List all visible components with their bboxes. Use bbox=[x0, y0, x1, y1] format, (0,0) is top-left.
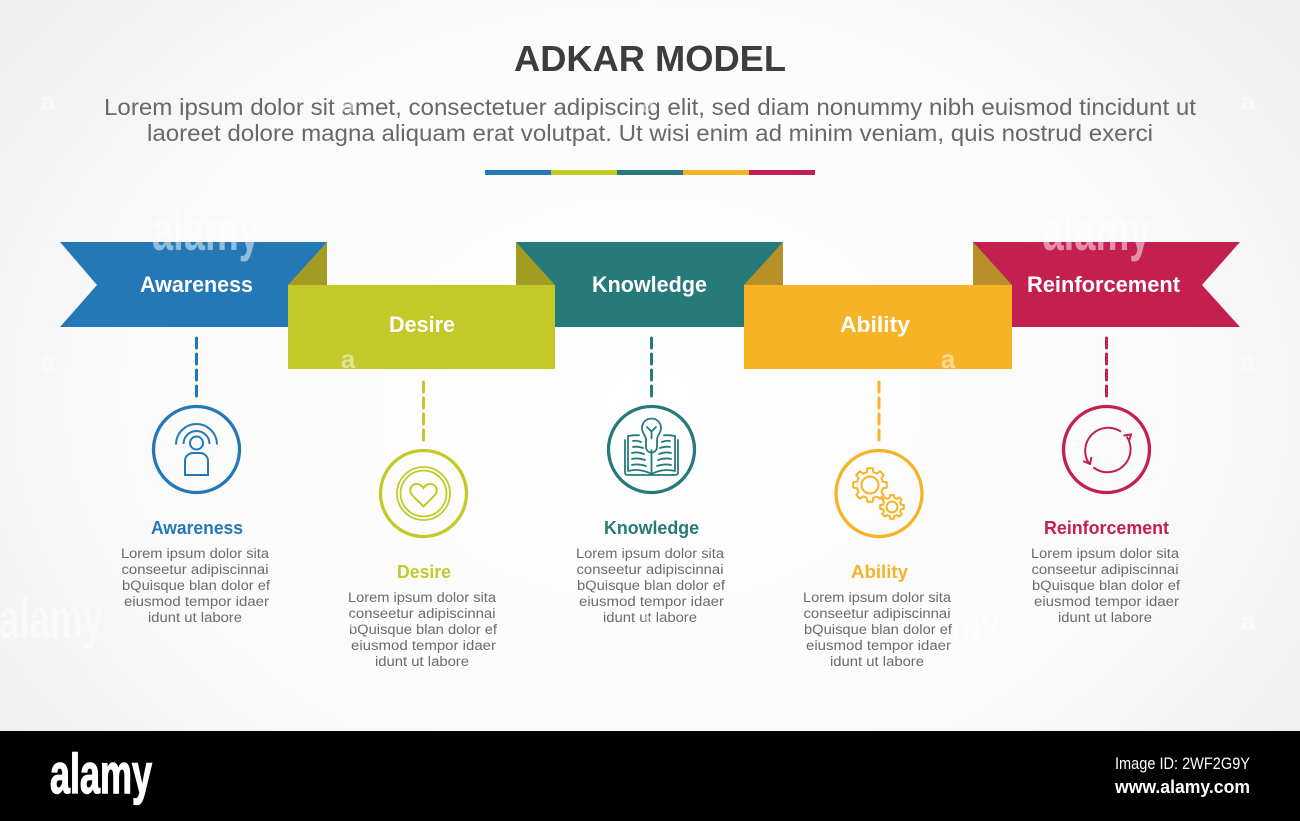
ribbon: reinforcement bbox=[973, 242, 1240, 327]
column: awareness bbox=[121, 338, 270, 625]
text: awareness: conseetur adipiscinnai bbox=[122, 562, 268, 577]
text: desire bbox=[348, 590, 497, 669]
ribbon: desire: Desire bbox=[389, 312, 455, 337]
column: ability bbox=[803, 382, 952, 669]
heading: desire: Desire bbox=[397, 562, 451, 582]
watermark overlay: my bbox=[951, 597, 999, 653]
connector: knowledge bbox=[650, 338, 653, 396]
watermark overlay: alamy bbox=[152, 199, 260, 262]
text: ability: idunt ut labore bbox=[830, 654, 924, 669]
column: reinforcement bbox=[1031, 338, 1180, 625]
heading: reinforcement: Reinforcement bbox=[1044, 518, 1169, 538]
text: ability: eiusmod tempor idaer bbox=[806, 638, 952, 653]
text: knowledge: bQuisque blan dolor ef bbox=[577, 578, 725, 593]
text: knowledge: conseetur adipiscinnai bbox=[576, 562, 724, 577]
text: awareness bbox=[121, 546, 270, 625]
text: desire: idunt ut labore bbox=[375, 654, 469, 669]
footer logo: alamy bbox=[50, 742, 152, 805]
column: knowledge bbox=[576, 338, 725, 625]
watermark overlay: a bbox=[1241, 86, 1256, 116]
watermark overlay: a bbox=[641, 88, 656, 118]
text: ability: Lorem ipsum dolor sita bbox=[803, 590, 952, 605]
connector: reinforcement bbox=[1105, 338, 1108, 396]
watermark overlay: alamy bbox=[0, 587, 103, 650]
website: www.alamy.com bbox=[1114, 777, 1250, 797]
connector: ability bbox=[878, 382, 880, 440]
text: desire: conseetur adipiscinnai bbox=[348, 606, 496, 621]
watermark overlay bbox=[0, 86, 1256, 653]
text: reinforcement: bQuisque blan dolor ef bbox=[1032, 578, 1180, 593]
text: knowledge: Lorem ipsum dolor sita bbox=[576, 546, 725, 561]
ribbon: knowledge bbox=[516, 242, 783, 327]
watermark overlay: a bbox=[941, 344, 956, 374]
text: awareness: idunt ut labore bbox=[148, 610, 242, 625]
watermark overlay: a bbox=[641, 606, 656, 636]
column: desire bbox=[348, 382, 497, 669]
watermark overlay: alamy bbox=[1042, 199, 1150, 262]
subtitle text bbox=[104, 94, 1197, 146]
watermark overlay: a bbox=[41, 346, 56, 376]
image id: Image ID: 2WF2G9Y bbox=[1115, 754, 1250, 773]
text: desire: Lorem ipsum dolor sita bbox=[348, 590, 497, 605]
watermark overlay: a bbox=[1241, 606, 1256, 636]
subtitle text: Lorem ipsum dolor sit amet, consectetuer adipiscing elit, sed diam nonummy nibh euismod tincidunt ut bbox=[104, 94, 1197, 120]
text: knowledge: eiusmod tempor idaer bbox=[579, 594, 725, 609]
ribbon banner bbox=[60, 242, 1240, 369]
ribbon: awareness bbox=[60, 242, 327, 327]
watermark overlay: a bbox=[41, 86, 56, 116]
icon: book with light bulb bbox=[608, 406, 694, 492]
icon: heart badge bbox=[380, 450, 466, 536]
connector: desire bbox=[422, 382, 425, 440]
ribbon: ability: Ability bbox=[840, 312, 911, 337]
ribbon: reinforcement: Reinforcement bbox=[1027, 272, 1181, 297]
colour divider bar bbox=[485, 170, 815, 175]
text: ability: bQuisque blan dolor ef bbox=[804, 622, 952, 637]
ribbon: ability bbox=[744, 285, 1012, 369]
heading: knowledge: Knowledge bbox=[604, 518, 699, 538]
icon: refresh arrows bbox=[1064, 406, 1150, 492]
ribbon: knowledge: Knowledge bbox=[592, 272, 707, 297]
watermark overlay: a bbox=[341, 606, 356, 636]
text: reinforcement: conseetur adipiscinnai bbox=[1032, 562, 1178, 577]
ribbon: awareness: Awareness bbox=[140, 272, 253, 297]
text: desire: bQuisque blan dolor ef bbox=[349, 622, 497, 637]
subtitle text: laoreet dolore magna aliquam erat volutpat. Ut wisi enim ad minim veniam, quis nostrud exerci bbox=[147, 120, 1153, 146]
heading: awareness: Awareness bbox=[151, 518, 243, 538]
icon: gears bbox=[836, 450, 922, 536]
text: awareness: Lorem ipsum dolor sita bbox=[121, 546, 270, 561]
title: ADKAR MODEL bbox=[514, 38, 786, 79]
text: reinforcement: idunt ut labore bbox=[1058, 610, 1152, 625]
text: reinforcement: eiusmod tempor idaer bbox=[1034, 594, 1180, 609]
text: desire: eiusmod tempor idaer bbox=[351, 638, 497, 653]
text: ability: conseetur adipiscinnai bbox=[804, 606, 950, 621]
text: reinforcement: Lorem ipsum dolor sita bbox=[1031, 546, 1180, 561]
ribbon: desire bbox=[288, 285, 555, 369]
watermark overlay: a bbox=[341, 344, 356, 374]
text: reinforcement bbox=[1031, 546, 1180, 625]
watermark overlay: a bbox=[1241, 346, 1256, 376]
icon: person broadcasting bbox=[154, 406, 240, 492]
footer bar bbox=[0, 731, 1300, 821]
text: awareness: eiusmod tempor idaer bbox=[124, 594, 270, 609]
text: knowledge: idunt ut labore bbox=[603, 610, 697, 625]
text: awareness: bQuisque blan dolor ef bbox=[122, 578, 270, 593]
text: knowledge bbox=[576, 546, 725, 625]
connector: awareness bbox=[195, 338, 198, 396]
text: ability bbox=[803, 590, 952, 669]
heading: ability: Ability bbox=[851, 562, 908, 582]
watermark overlay: a bbox=[341, 88, 356, 118]
